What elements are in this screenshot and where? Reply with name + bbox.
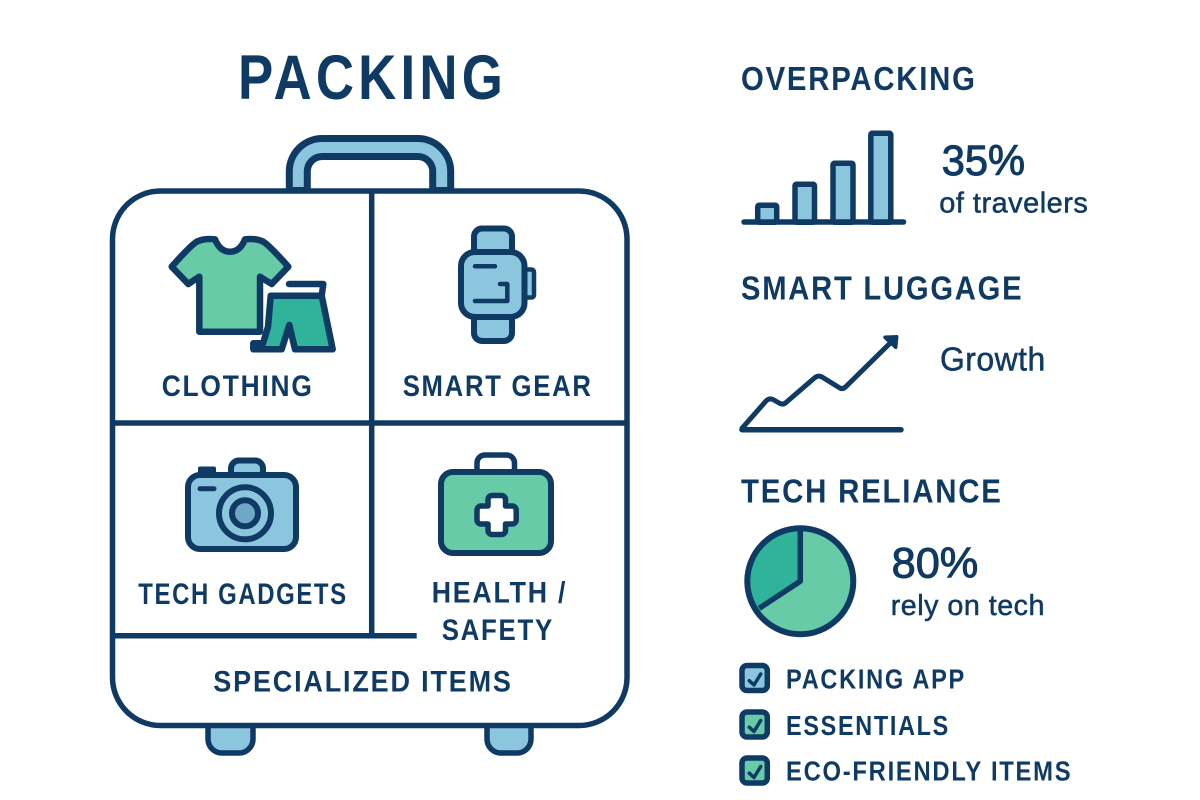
checklist xyxy=(742,663,1072,787)
stat: 80%: 80% xyxy=(892,539,978,587)
label: smart gear: SMART GEAR xyxy=(403,370,593,403)
right foot xyxy=(487,725,531,753)
label: tech gadgets: TECH GADGETS xyxy=(138,578,348,611)
heading: overpacking: OVERPACKING xyxy=(741,60,977,97)
panel: tech gadgets xyxy=(138,460,348,611)
panel: overpacking xyxy=(741,60,1088,222)
suitcase xyxy=(112,148,627,753)
pie chart xyxy=(747,528,853,634)
suitcase body xyxy=(112,191,627,726)
icon: first aid kit xyxy=(441,455,551,553)
checklist item: essentials: ESSENTIALS xyxy=(786,710,950,741)
left foot xyxy=(208,725,253,753)
panel: clothing xyxy=(162,239,333,403)
suitcase handle xyxy=(298,148,442,193)
heading: smart luggage: SMART LUGGAGE xyxy=(741,269,1023,306)
title: PACKING xyxy=(238,43,507,113)
icon: smartwatch xyxy=(461,228,534,341)
panel: smart gear xyxy=(403,228,593,403)
caption: of travelers: of travelers xyxy=(939,188,1088,220)
label: specialized items: SPECIALIZED ITEMS xyxy=(213,666,513,699)
panel: smart luggage xyxy=(741,269,1046,430)
icon: shorts xyxy=(253,284,333,349)
bar chart xyxy=(744,133,904,222)
caption: rely on tech: rely on tech xyxy=(891,590,1045,622)
label: clothing: CLOTHING xyxy=(162,370,314,403)
checklist item: packing app: PACKING APP xyxy=(786,663,966,694)
label: health: HEALTH / xyxy=(432,577,567,610)
panel: health and safety xyxy=(432,455,567,647)
icon: camera xyxy=(188,460,296,549)
checklist item: essentials xyxy=(742,710,950,741)
label: safety: SAFETY xyxy=(442,614,554,647)
checklist item: eco-friendly items: ECO-FRIENDLY ITEMS xyxy=(786,756,1072,787)
heading: tech reliance: TECH RELIANCE xyxy=(741,473,1003,510)
caption: growth: Growth xyxy=(940,341,1046,378)
line chart with arrow xyxy=(742,337,901,430)
compartment dividers xyxy=(113,191,627,636)
panel: tech reliance xyxy=(741,473,1045,634)
stat: 35%: 35% xyxy=(942,137,1025,185)
icon: t-shirt xyxy=(172,239,288,332)
